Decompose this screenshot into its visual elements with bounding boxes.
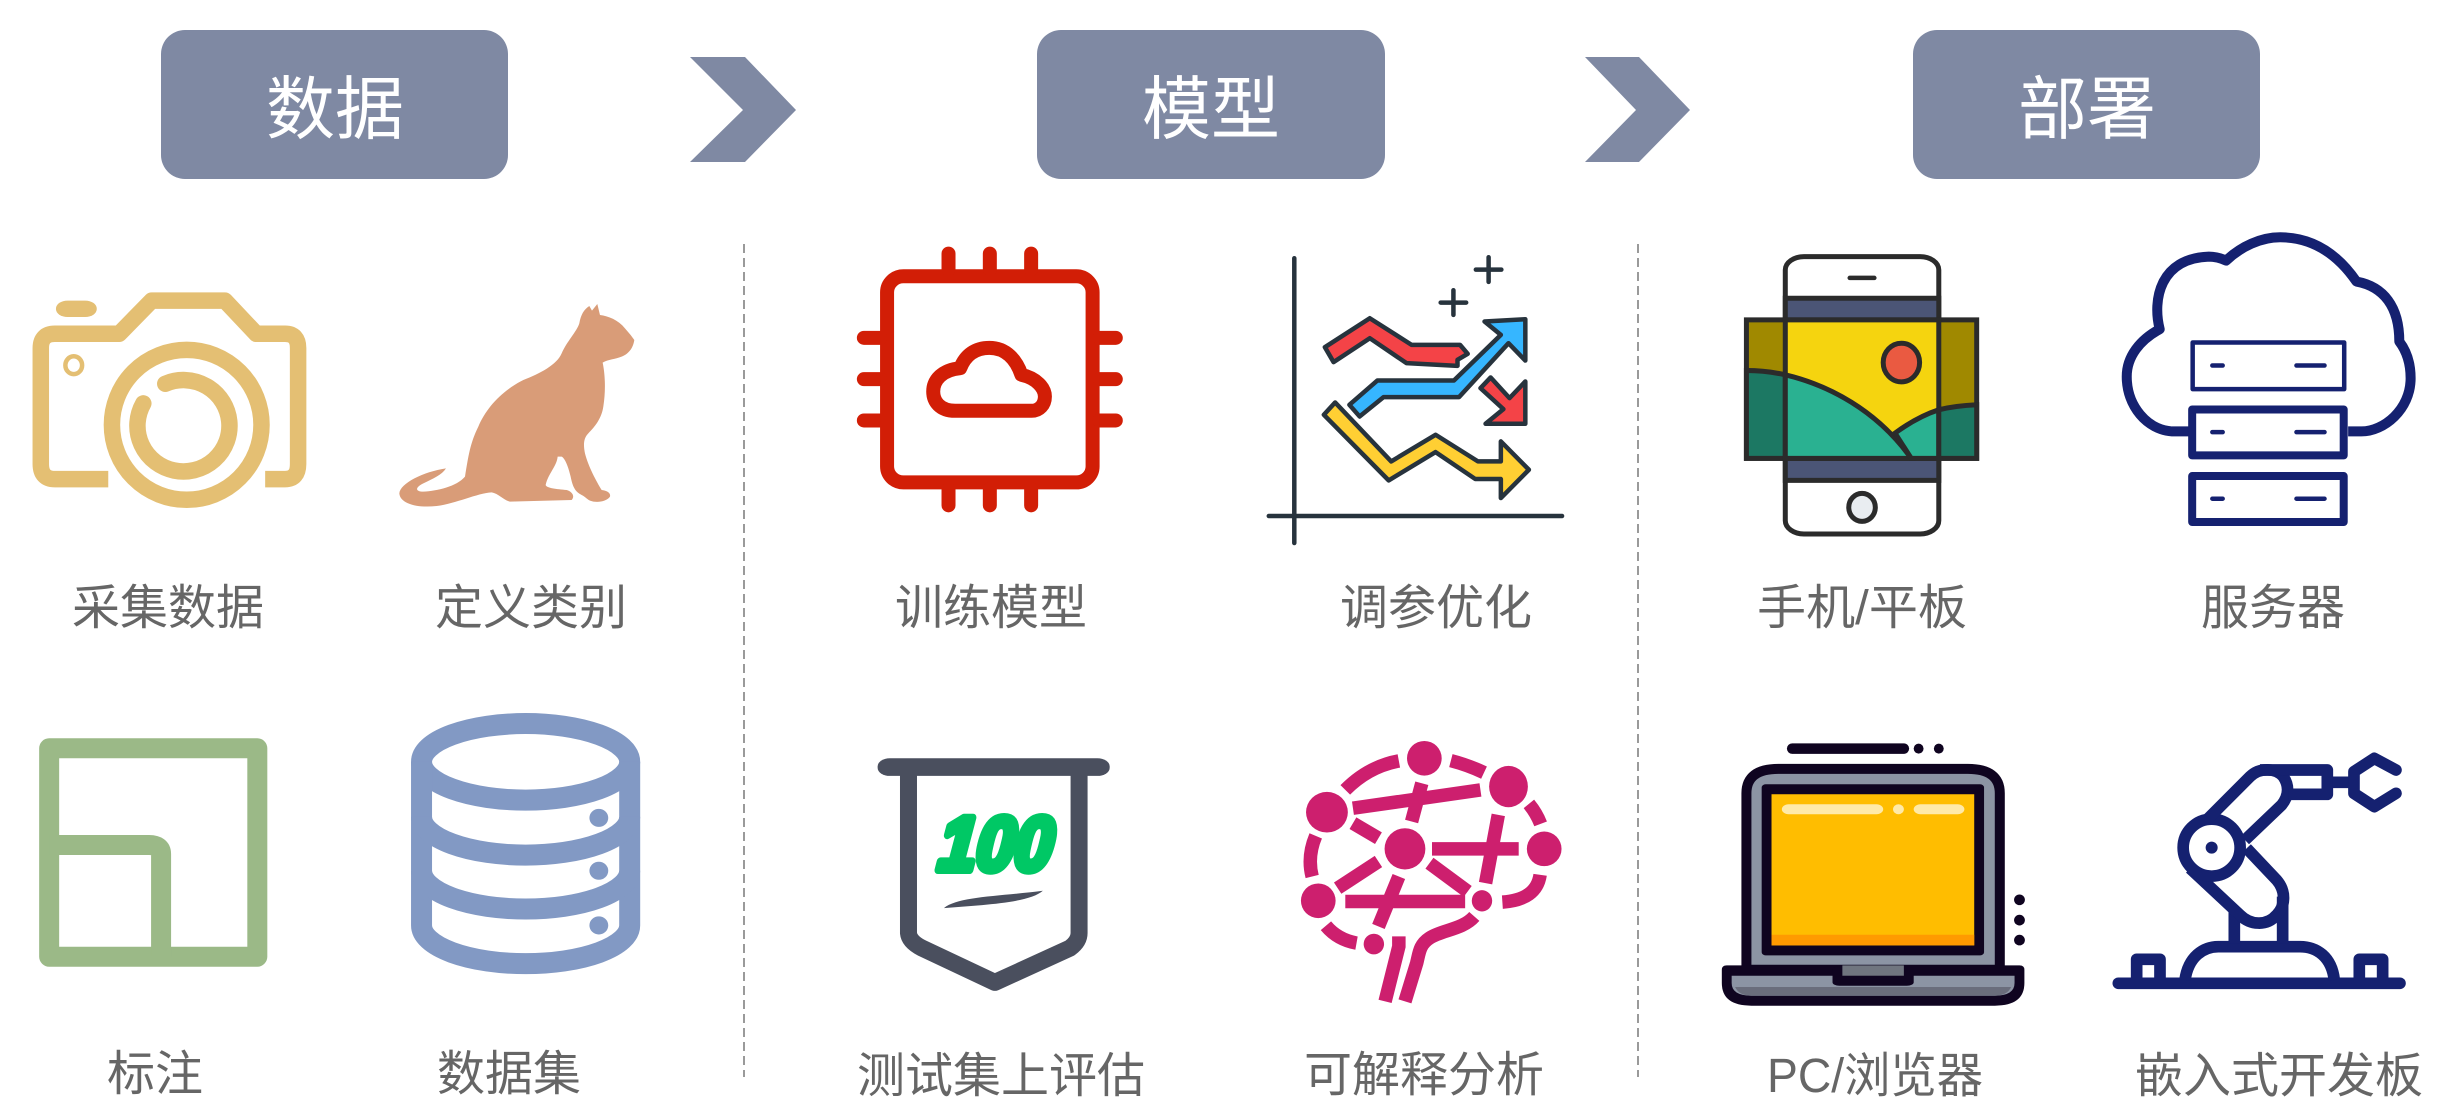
heading: 模型 [1037,30,1385,179]
heading: 模型: 模型 [1142,71,1280,148]
icon: score banner [878,758,1110,982]
icon: score banner: 100 [936,802,1057,887]
label: 测试集上评估: 测试集上评估 [857,1050,1145,1103]
icon: annotation box [49,748,257,957]
label: 采集数据: 采集数据 [72,582,264,635]
label: 可解释分析: 可解释分析 [1304,1049,1544,1102]
icon: cat [399,304,634,507]
label: 嵌入式开发板: 嵌入式开发板 [2135,1050,2423,1103]
icon: cloud servers [2127,237,2411,522]
icon: robot arm [2118,758,2400,983]
label: 标注: 标注 [107,1048,203,1101]
label: 手机/平板: 手机/平板 [1757,582,1967,635]
label: 定义类别: 定义类别 [435,582,627,635]
icon: neural brain [1301,741,1562,1001]
label: 服务器: 服务器 [2201,582,2345,635]
icon: phone and tablet [1746,257,1977,534]
arrow: 数据 to 模型 [690,57,796,162]
heading: 数据: 数据 [266,71,404,148]
icon: laptop [1722,744,2025,1006]
label: 数据集: 数据集 [437,1048,581,1101]
label: 调参优化: 调参优化 [1340,582,1532,635]
label: PC/浏览器: PC/浏览器 [1767,1050,1983,1103]
icon: AI chip [864,254,1116,505]
heading: 数据 [161,30,508,179]
label: 训练模型: 训练模型 [895,582,1087,635]
arrow: 模型 to 部署 [1585,57,1690,162]
icon: database [422,724,630,964]
icon: tuning chart [1269,257,1562,543]
heading: 部署 [1913,30,2260,179]
heading: 部署: 部署 [2018,71,2156,148]
icon: camera [41,301,298,500]
